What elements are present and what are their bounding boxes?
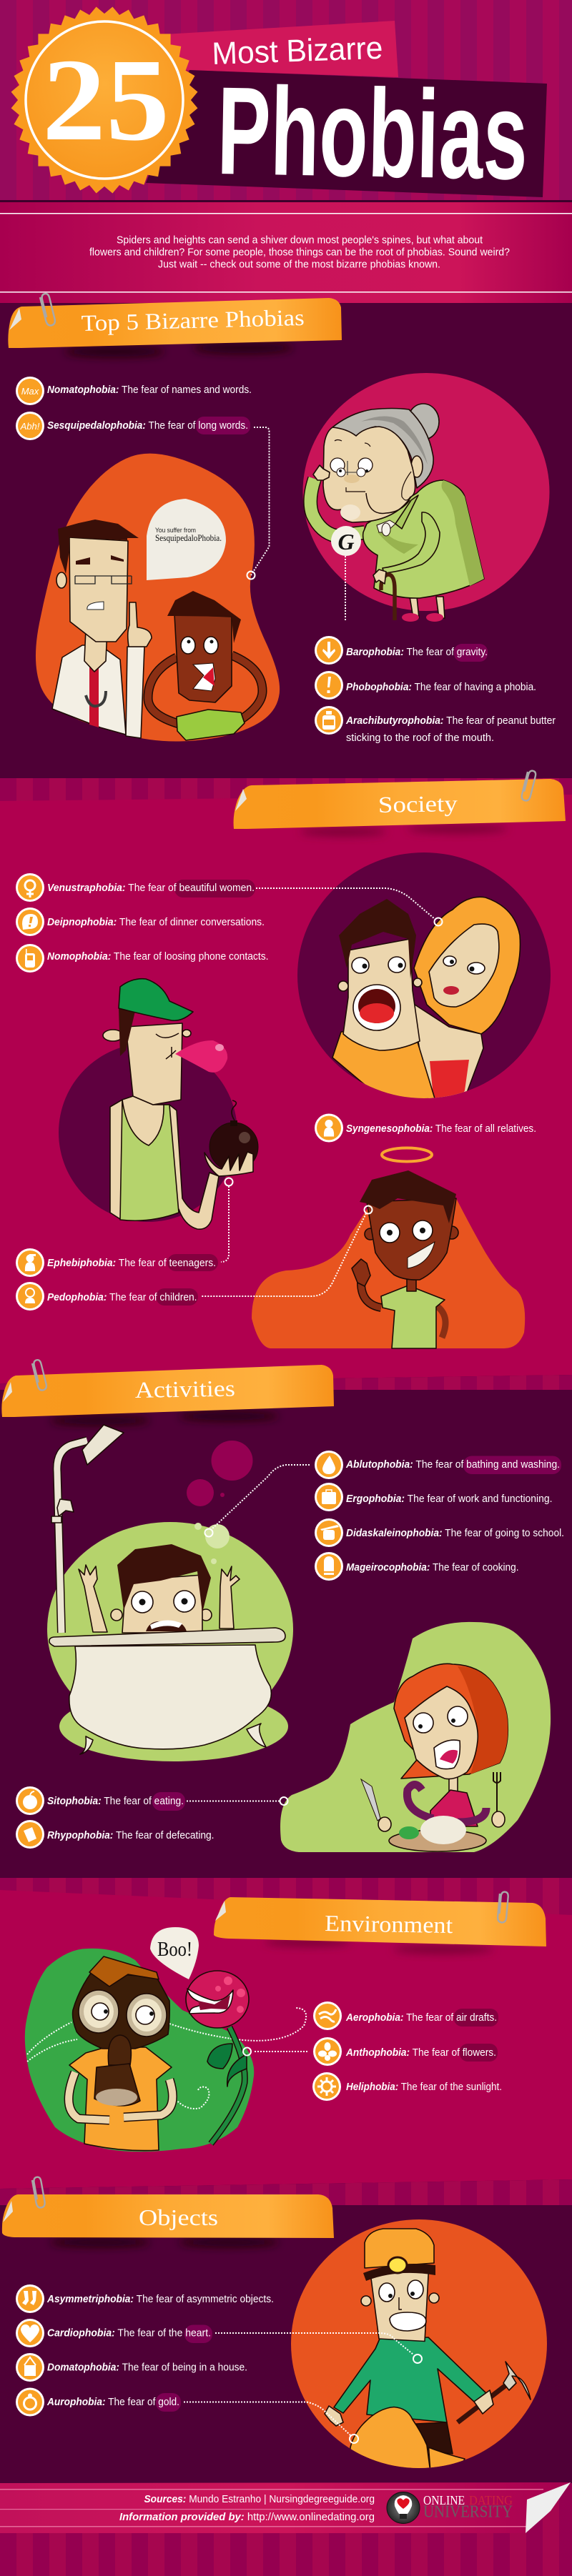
highlight: air drafts xyxy=(454,2009,498,2027)
heading banner: environment xyxy=(214,1891,546,1954)
ribbon shape xyxy=(0,2482,571,2533)
highlight: eating xyxy=(152,1792,185,1811)
icon: Abh xyxy=(16,412,44,440)
icon: speech exclamation xyxy=(16,907,44,936)
background: objects section xyxy=(0,2205,572,2484)
page curl xyxy=(526,2482,571,2533)
row: Mageirocophobia xyxy=(315,1552,519,1581)
icon: apple xyxy=(16,1786,44,1815)
row: Rhypophobia xyxy=(16,1820,214,1849)
bathtub xyxy=(49,1628,285,1754)
row: Sitophobia xyxy=(16,1786,185,1815)
row: Arachibutyrophobia xyxy=(315,706,556,744)
background: environment section xyxy=(0,1890,572,2189)
characters: man and woman xyxy=(332,897,520,1115)
row: Asymmetriphobia xyxy=(16,2284,274,2313)
icon: toilet paper xyxy=(16,1820,44,1849)
text: Sitophobia: Sitophobia: The fear of eating. xyxy=(47,1795,184,1807)
panel: top 5 bizarre phobias xyxy=(8,293,556,744)
icon: venus xyxy=(16,873,44,902)
row: Ergophobia xyxy=(315,1483,552,1511)
text: Deipnophobia: Deipnophobia: The fear of dinner conversations. xyxy=(47,916,265,928)
highlight: long words xyxy=(196,417,250,434)
character: teenager xyxy=(103,979,258,1229)
heading banner: activities xyxy=(1,1359,334,1425)
highlight: gravity xyxy=(454,644,488,662)
text: Ablutophobia: Ablutophobia: The fear of bathing and washing. xyxy=(345,1458,560,1471)
icon: house xyxy=(16,2353,44,2382)
speech bubble: boo: Boo! xyxy=(157,1939,192,1961)
background: stripes before objects xyxy=(0,2179,572,2206)
row: Ephebiphobia xyxy=(16,1248,218,1277)
icon: school cap xyxy=(315,1518,343,1547)
text: Pedophobia: Pedophobia: The fear of children. xyxy=(47,1291,197,1303)
connector: gold xyxy=(184,2402,358,2443)
icon: briefcase xyxy=(315,1483,343,1511)
row: Nomatophobia xyxy=(16,377,252,405)
text: Didaskaleinophobia: Didaskaleinophobia: The fear of going to school. xyxy=(346,1527,564,1539)
row: Ablutophobia xyxy=(315,1451,561,1479)
logo: Online Dating University: ONLINE xyxy=(423,2493,465,2507)
information provided by text: Information provided by: http://www.onlinedating.org xyxy=(119,2511,375,2523)
callout: letter G: G xyxy=(337,529,355,555)
character: gas mask man xyxy=(69,1956,172,2151)
intro text: flowers and children? For some people, those things can be the root of phobias. Sound weird? xyxy=(89,247,510,259)
ribbon: phobias xyxy=(146,70,547,197)
speech bubble xyxy=(147,499,226,580)
connector: long words xyxy=(247,427,269,579)
icon: socks xyxy=(16,2284,44,2313)
circle background xyxy=(291,2219,547,2468)
character: frightened patient xyxy=(148,591,262,740)
illustration: grandmother xyxy=(303,373,549,622)
icon: down arrow xyxy=(315,636,343,665)
illustration: teenager with bomb xyxy=(59,979,258,1262)
text: Ergophobia: Ergophobia: The fear of work and functioning. xyxy=(346,1493,552,1505)
illustration: doctor and patient xyxy=(36,427,280,742)
intro text xyxy=(89,234,510,270)
row: Phobophobia xyxy=(315,671,536,700)
heading banner: activities: Activities xyxy=(134,1376,235,1403)
shower xyxy=(51,1425,124,1633)
footer ribbon xyxy=(0,2482,571,2533)
row: Didaskaleinophobia xyxy=(315,1518,564,1547)
text: Domatophobia: Domatophobia: The fear of being in a house. xyxy=(47,2361,247,2374)
blob: green background xyxy=(280,1622,551,1852)
text: Aerophobia: Aerophobia: The fear of air drafts. xyxy=(345,2011,497,2024)
text: Asymmetriphobia: Asymmetriphobia: The fear of asymmetric objects. xyxy=(46,2293,274,2305)
text: Rhypophobia: Rhypophobia: The fear of defecating. xyxy=(47,1829,214,1841)
character: boy xyxy=(352,1170,458,1348)
character: grandmother xyxy=(310,404,484,622)
text: Cardiophobia: Cardiophobia: The fear of the heart. xyxy=(47,2327,211,2339)
icon: peanut butter jar xyxy=(315,706,343,735)
text: Heliphobia: Heliphobia: The fear of the sunlight. xyxy=(346,2081,502,2093)
connector: beautiful women xyxy=(256,888,442,926)
illustration: miner xyxy=(184,2219,547,2472)
icon: Abh: Abh! xyxy=(20,421,40,432)
row: Deipnophobia xyxy=(16,907,265,936)
icon: chef hat xyxy=(315,1552,343,1581)
illustration: man and woman xyxy=(256,852,551,1115)
connector: bathing and washing xyxy=(194,1465,310,1564)
row: Venustraphobia xyxy=(16,873,255,902)
row: Anthophobia xyxy=(313,2037,498,2066)
title: 25 badge xyxy=(11,7,197,193)
icon: exclamation xyxy=(315,671,343,700)
highlight: teenagers xyxy=(167,1254,218,1271)
row: Domatophobia xyxy=(16,2353,247,2382)
background: stripes before activities xyxy=(0,1375,572,1391)
blob: green background xyxy=(47,1522,293,1761)
background: striped header xyxy=(0,0,572,202)
ribbon lines xyxy=(0,2489,543,2527)
circle background xyxy=(59,1043,237,1222)
background: bottom stripes xyxy=(0,2483,572,2576)
heading banner: society xyxy=(234,770,566,836)
row: Nomophobia xyxy=(16,944,269,973)
blob: green background xyxy=(25,1949,254,2152)
logo: Online Dating University xyxy=(387,2492,513,2524)
callout: letter G xyxy=(331,526,361,620)
text: Syngenesophobia: Syngenesophobia: The fear of all relatives. xyxy=(346,1123,536,1135)
icon: water drop xyxy=(315,1451,343,1479)
highlight: heart xyxy=(184,2325,212,2343)
icon: teen xyxy=(16,1248,44,1277)
heading banner: environment: Environment xyxy=(325,1910,453,1938)
heading banner: society: Society xyxy=(378,790,458,817)
speech bubble: boo xyxy=(150,1927,199,1979)
illustration: woman eating octopus xyxy=(280,1622,551,1852)
background: top five section xyxy=(0,303,572,778)
plant monster xyxy=(186,1971,249,2144)
row: Aurophobia xyxy=(16,2388,181,2417)
character: red-haired woman xyxy=(361,1664,508,1851)
character: bather xyxy=(79,1544,240,1633)
illustration: gas mask and plant xyxy=(25,1927,307,2152)
icon: person xyxy=(315,1113,343,1142)
connector: flowers xyxy=(243,2048,307,2055)
text: Aurophobia: Aurophobia: The fear of gold. xyxy=(46,2396,179,2408)
highlight: flowers xyxy=(460,2044,498,2062)
background: stripes before society xyxy=(0,778,572,807)
text: Anthophobia: Anthophobia: The fear of flowers. xyxy=(345,2047,496,2059)
blob: orange background xyxy=(252,1198,525,1348)
row: Aerophobia xyxy=(313,2001,498,2030)
wind dots xyxy=(27,2008,306,2109)
logo: Online Dating University: DATING xyxy=(469,2493,513,2507)
text: Nomophobia: Nomophobia: The fear of loosing phone contacts. xyxy=(47,950,269,963)
highlight: children xyxy=(156,1288,198,1306)
sources text: Sources: Mundo Estranho | Nursingdegreeguide.org xyxy=(144,2493,375,2505)
row: Cardiophobia xyxy=(16,2319,212,2347)
text: Arachibutyrophobia: Arachibutyrophobia: The fear of peanut butter xyxy=(345,715,556,727)
text: Nomatophobia: Nomatophobia: The fear of names and words. xyxy=(47,384,252,396)
icon: sun xyxy=(312,2072,341,2101)
icon: heart xyxy=(16,2319,44,2347)
highlight: gold xyxy=(156,2393,181,2412)
title: 25 badge: 25 xyxy=(42,34,169,165)
text: Barophobia: Barophobia: The fear of gravity. xyxy=(346,646,488,658)
intro text: Just wait -- check out some of the most bizarre phobias known. xyxy=(158,259,440,270)
illustration: smiling boy with halo xyxy=(202,1148,525,1348)
character: miner xyxy=(325,2229,531,2472)
heading banner: top 5: Top 5 Bizarre Phobias xyxy=(81,304,305,336)
heading banner: objects: Objects xyxy=(139,2204,218,2230)
circle background xyxy=(297,852,551,1098)
connector: teenagers xyxy=(221,1178,233,1262)
text: Mageirocophobia: Mageirocophobia: The fear of cooking. xyxy=(346,1561,519,1573)
row: Pedophobia xyxy=(16,1282,198,1311)
background: society section xyxy=(0,795,572,1383)
connector: heart xyxy=(215,2333,422,2363)
row: Barophobia xyxy=(315,636,488,665)
panel: society xyxy=(16,770,566,1348)
icon: phone xyxy=(16,944,44,973)
text: Ephebiphobia: Ephebiphobia: The fear of teenagers. xyxy=(47,1257,216,1269)
speech bubble: SesquipedaloPhobia. xyxy=(155,532,222,543)
speech bubble: You suffer from xyxy=(155,527,196,534)
character: doctor xyxy=(52,519,152,738)
connector: eating xyxy=(187,1797,287,1805)
icon: Max xyxy=(16,377,44,405)
text: Sesquipedalophobia: Sesquipedalophobia: The fear of long words. xyxy=(47,419,248,432)
title: most bizarre: Most Bizarre xyxy=(212,31,383,71)
icon: child xyxy=(16,1282,44,1311)
icon: ring xyxy=(16,2388,44,2417)
title block xyxy=(11,7,547,207)
row: Syngenesophobia xyxy=(315,1113,536,1142)
background: stripes before environment xyxy=(0,1878,572,1921)
heading banner: objects xyxy=(2,2177,334,2247)
text: Venustraphobia: Venustraphobia: The fear of beautiful women. xyxy=(47,882,255,894)
heading banner: top 5 xyxy=(8,293,342,357)
ribbon: most bizarre xyxy=(164,21,398,77)
blob: orange background xyxy=(36,454,280,742)
illustration: man in bathtub xyxy=(47,1425,310,1761)
logo: Online Dating University: UNIVERSITY xyxy=(423,2502,513,2521)
text: Phobophobia: Phobophobia: The fear of having a phobia. xyxy=(346,681,536,693)
panel: objects xyxy=(2,2177,547,2472)
blob: pink circle xyxy=(303,373,549,611)
background: intro band xyxy=(0,200,572,303)
background: activities section xyxy=(0,1390,572,1878)
icon: flower xyxy=(313,2037,342,2066)
intro text: Spiders and heights can send a shiver down most people's spines, but what about xyxy=(117,234,483,246)
text: Arachibutyrophobia second line: sticking to the roof of the mouth. xyxy=(346,732,494,744)
highlight: bathing and washing xyxy=(463,1456,561,1474)
icon: wind xyxy=(313,2001,342,2030)
icon: Max: Max xyxy=(21,386,39,397)
row: Sesquipedalophobia xyxy=(16,412,250,440)
panel: activities xyxy=(1,1359,564,1852)
highlight: beautiful women xyxy=(174,880,255,897)
bubbles xyxy=(187,1441,253,1506)
halo xyxy=(382,1148,432,1162)
row: Heliphobia xyxy=(312,2072,502,2101)
connector: children xyxy=(202,1206,372,1296)
panel: environment xyxy=(25,1891,546,2152)
